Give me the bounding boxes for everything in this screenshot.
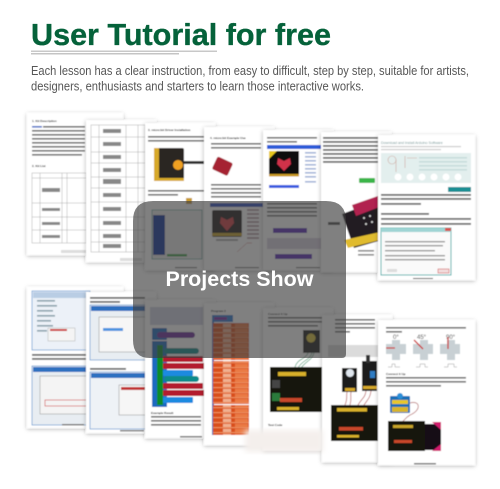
page: arduino software: Download and Install Arduino Software	[381, 141, 443, 145]
teal download box	[381, 153, 471, 183]
servo angle diagrams: 0°	[393, 335, 399, 341]
title underline	[31, 50, 217, 54]
page: driver installation	[145, 123, 215, 270]
page: driver installation: 3. micro:bit Driver Installation	[148, 128, 191, 132]
page: web links and board	[321, 132, 396, 272]
icon: sensors	[342, 355, 377, 392]
screenshot: installer	[152, 210, 202, 259]
page: code blocks micro:bit	[263, 130, 333, 270]
teal button	[448, 187, 471, 192]
panel: project pages row 1	[27, 113, 475, 280]
page: sensor table	[86, 120, 156, 262]
page: button module connection: Connect It Up	[268, 312, 288, 316]
page: servo: Connect It Up	[386, 372, 406, 376]
code blocks	[152, 328, 205, 407]
icon: micro:bit board with USB cable	[154, 148, 205, 181]
page: sensor wiring	[322, 315, 392, 462]
screenshot: arduino setup dialog	[381, 228, 451, 275]
panel: projects show overlay	[133, 201, 346, 358]
servo angle diagrams: 90°	[446, 335, 456, 341]
overlay heading: Projects Show	[166, 268, 314, 291]
page: driver wizard 2	[86, 292, 156, 433]
page: arduino software	[378, 135, 475, 280]
icon: micro:bit heart	[212, 210, 242, 241]
page: micro:bit example: 4. micro:bit Example Use	[210, 136, 246, 140]
screenshot: driver installed	[90, 372, 148, 429]
servo angle diagrams	[386, 335, 460, 367]
servo angle diagrams: 45°	[417, 335, 427, 341]
screenshot: browse for driver	[90, 305, 148, 360]
page: orange code table: Program 2	[211, 309, 226, 313]
page: kit description: 1. Kit Description	[32, 119, 57, 123]
orange blocks	[212, 315, 249, 435]
screenshot: device manager	[32, 291, 90, 350]
icon: micro:bit simulator	[269, 151, 299, 176]
icon: micro:bit board large	[342, 196, 396, 248]
green button	[359, 178, 375, 183]
page: orange code table	[204, 303, 274, 445]
intro text	[31, 63, 469, 94]
panel: project pages row 2	[27, 287, 475, 465]
icon: shield board	[270, 367, 322, 412]
page: block code example	[145, 300, 215, 438]
watermark smudge	[245, 430, 323, 452]
icon: servo motor	[390, 393, 410, 413]
page: kit description: 2. Kit List	[32, 164, 46, 168]
page: button module connection	[263, 308, 333, 450]
intro text: designers, enthusiasts and starters to learn those interactive works.	[31, 78, 364, 94]
example result text: Example Result	[151, 411, 173, 415]
page: micro:bit example	[204, 127, 274, 270]
screenshot: update driver	[32, 366, 90, 425]
page: servo	[378, 320, 475, 465]
icon: shield and micro:bit	[388, 421, 441, 451]
page: driver wizard 1	[27, 287, 123, 428]
page: kit description	[27, 113, 123, 255]
page: button module connection: Test Code	[268, 423, 283, 427]
title: User Tutorial for free	[31, 17, 331, 52]
icon: shield board	[331, 405, 378, 441]
icon: button sensor	[303, 330, 320, 353]
